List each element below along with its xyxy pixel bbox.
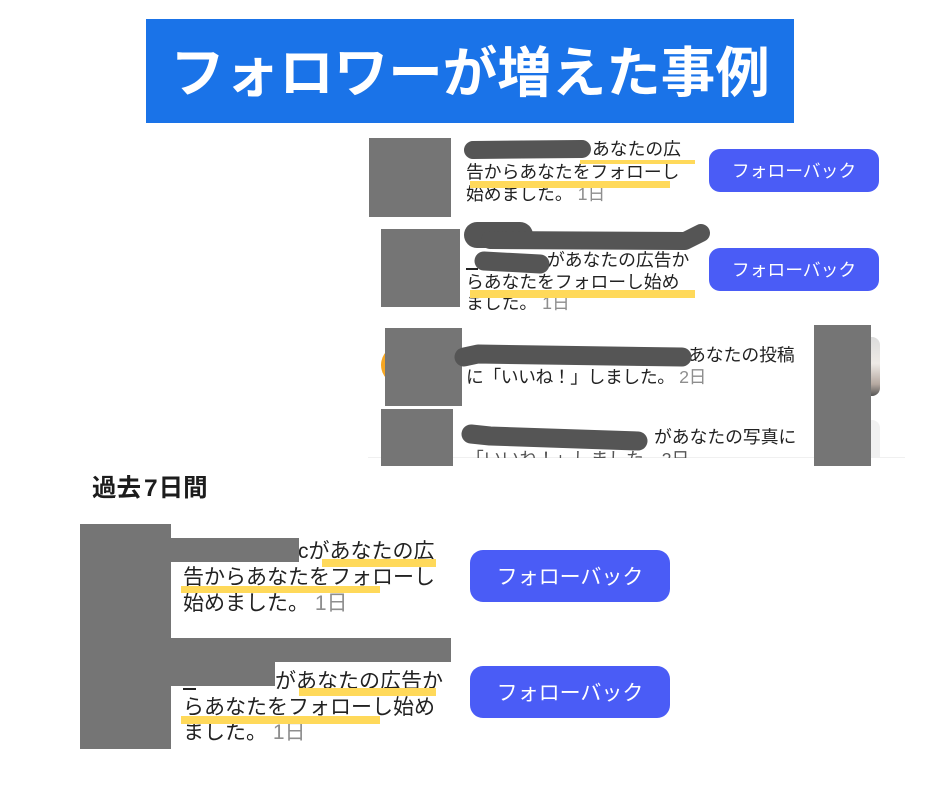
notification 1 highlight underline bottom: [470, 181, 670, 188]
notification 2 follow back button: [709, 248, 879, 291]
notification 1 name redaction: [171, 538, 299, 562]
notification 1 highlight underline top: [580, 160, 695, 164]
notification 1 follow back button: フォローバック: [497, 566, 643, 589]
notification 2 highlight underline: [470, 290, 695, 298]
notification 1 avatar redaction: [369, 138, 451, 217]
notification 2 follow back button: フォローバック: [497, 682, 643, 705]
notification 2 text: があなたの広告か: [547, 250, 689, 270]
notification 1 text: 告からあなたをフォローし: [466, 162, 679, 182]
notification 1 text: [466, 139, 681, 204]
divider line: [368, 457, 905, 458]
notification 1 highlight underline top: [322, 559, 436, 567]
notification 2 follow back button: [470, 666, 670, 718]
notification 2 stray underscore: [183, 688, 196, 690]
notification 2 text: ました。 1日: [466, 293, 570, 313]
notification 2 stray underscore: [466, 268, 478, 270]
avatar redaction column: [80, 524, 171, 749]
notification 3 avatar redaction: [385, 328, 462, 406]
notification 3 text: [466, 345, 795, 387]
title banner: [146, 19, 794, 123]
notification 1 follow back button: フォローバック: [732, 161, 856, 181]
notification 2 name redaction upper: [171, 638, 451, 662]
panel: lower notification screenshot: [80, 524, 670, 749]
notification 2 text: [466, 250, 689, 313]
scribbled name redactions: [454, 140, 710, 450]
notification 3 orange avatar edge: [381, 345, 421, 385]
notification 2 text: らあなたをフォローし始め: [183, 696, 435, 719]
notification 1 text: cがあなたの広: [298, 540, 434, 563]
notification 2 highlight underline bottom: [181, 716, 380, 724]
notification 1 text: 告からあなたをフォローし: [183, 566, 435, 589]
notification 1 text: 始めました。 1日: [466, 184, 605, 204]
notification 4 text: があなたの写真に: [654, 427, 796, 447]
notification 1 follow back button: [709, 149, 879, 192]
notification 2 text: があなたの広告か: [275, 670, 443, 693]
notification 2 name redaction lower: [171, 662, 275, 686]
notification 1 follow back button: [470, 550, 670, 602]
notification 1 text: [183, 540, 435, 615]
notification 3 text: に「いいね！」しました。 2日: [466, 367, 706, 387]
notification 2 text: らあなたをフォローし始め: [466, 272, 679, 292]
right side redaction: [814, 325, 871, 466]
thumbnail sliver lower: [865, 420, 880, 457]
heading: past 7 days: 過去7日間: [92, 475, 208, 502]
notification 1 highlight underline bottom: [181, 586, 380, 593]
notification 2 text: [183, 670, 443, 744]
thumbnail sliver upper: [865, 337, 880, 396]
notification 2 avatar redaction: [381, 229, 460, 307]
notification 2 highlight underline top: [299, 688, 436, 696]
panel: upper notification screenshot: [368, 138, 905, 466]
notification 3 text: あなたの投稿: [688, 345, 795, 365]
notification 1 text: あなたの広: [592, 139, 681, 159]
notification 2 follow back button: フォローバック: [732, 260, 856, 280]
notification 2 text: ました。 1日: [183, 721, 306, 744]
title banner: フォロワーが増えた事例: [170, 43, 770, 104]
notification 4 avatar redaction: [381, 409, 453, 466]
notification 1 text: 始めました。 1日: [183, 592, 348, 615]
